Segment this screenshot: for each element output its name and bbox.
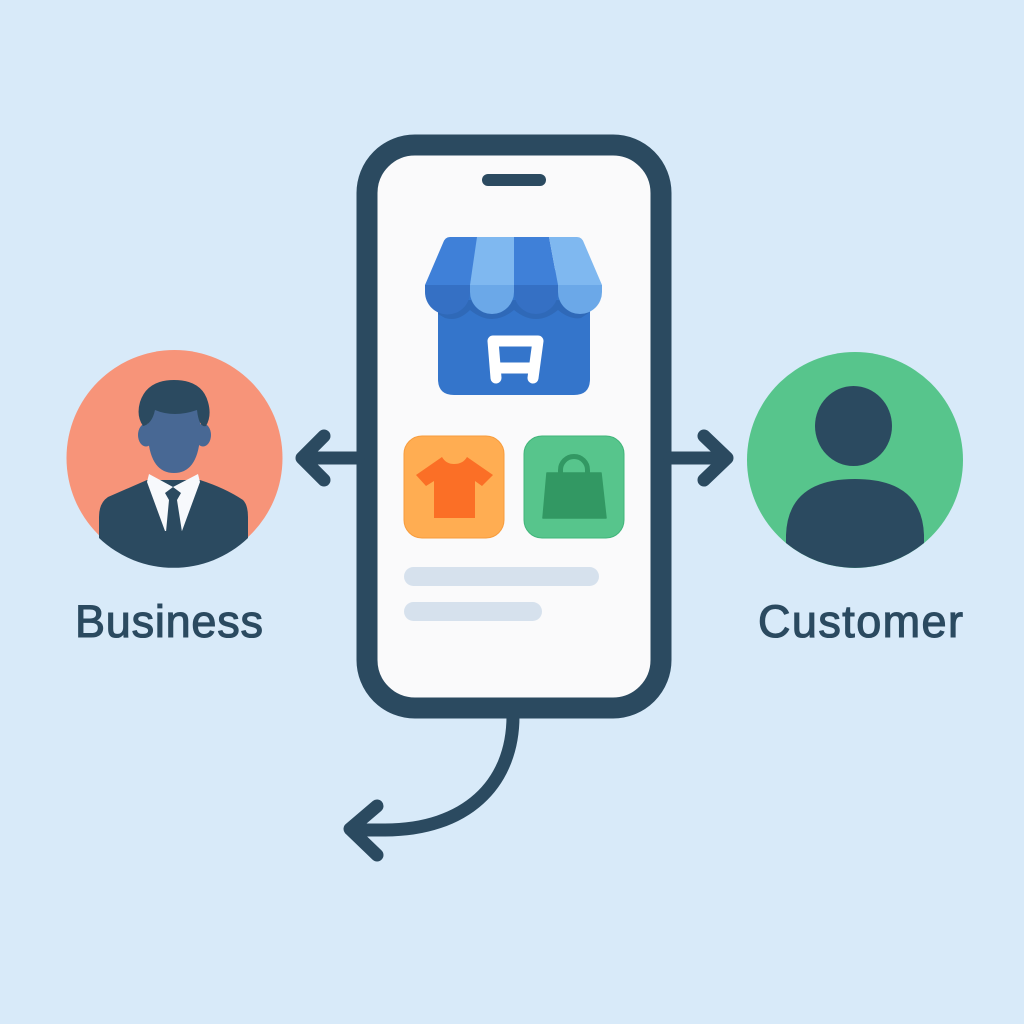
icon: customer person (747, 352, 963, 568)
label: Business: Business (75, 596, 263, 647)
arrow: curved downward (350, 716, 513, 855)
arrow: to business (302, 436, 358, 480)
icon: storefront (425, 237, 602, 395)
icon: business person (66, 350, 282, 568)
icon: t-shirt tile (404, 436, 504, 538)
arrow: to customer (670, 436, 727, 480)
label: Customer: Customer (758, 596, 963, 647)
phone (367, 145, 661, 708)
icon: shopping bag tile (524, 436, 624, 538)
text placeholder bars (404, 567, 599, 621)
